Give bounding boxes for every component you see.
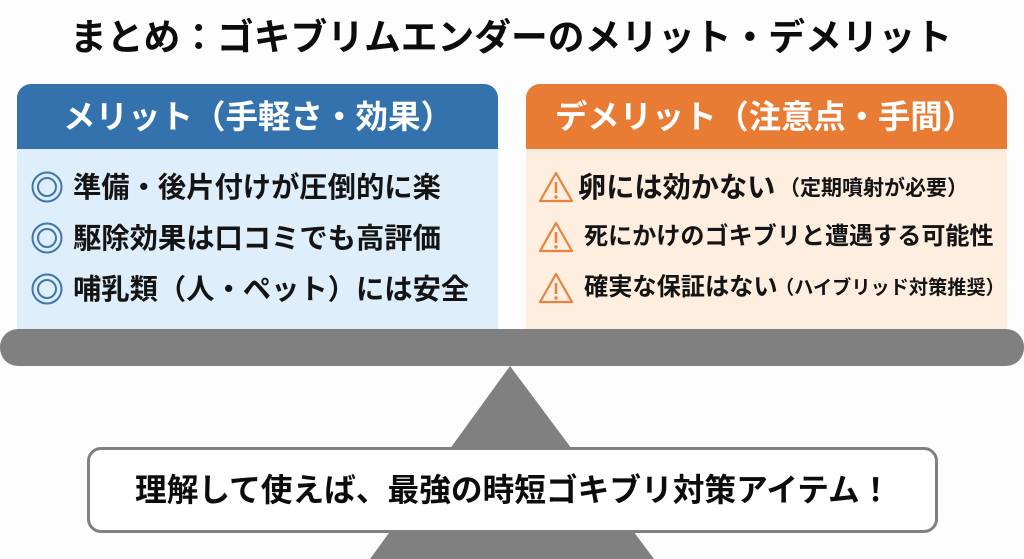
demerit text 2: 死にかけのゴキブリと遭遇する可能性	[584, 223, 994, 250]
demerit note 1: （定期噴射が必要）	[779, 177, 968, 200]
icon: double circle	[32, 172, 62, 202]
icon: double circle	[32, 222, 62, 254]
panel: demerits	[526, 84, 1007, 329]
merit text 1: 準備・後片付けが圧倒的に楽	[73, 171, 441, 203]
merits heading: メリット（手軽さ・効果）	[63, 99, 453, 135]
demerits header	[526, 84, 1007, 149]
merits header	[17, 84, 498, 149]
icon: warning triangle	[538, 172, 574, 202]
title: まとめ：ゴキブリムエンダーのメリット・デメリット	[70, 17, 952, 58]
icon: scale fulcrum	[370, 366, 654, 559]
scale beam	[0, 329, 1024, 366]
merit item 1	[32, 171, 441, 203]
demerit text 1: 卵には効かない	[578, 171, 775, 203]
demerit text 3: 確実な保証はない	[584, 274, 778, 301]
demerit item 3	[538, 272, 1005, 304]
merit text 3: 哺乳類（人・ペット）には安全	[73, 273, 469, 305]
merit item 3	[32, 273, 469, 305]
merit text 2: 駆除効果は口コミでも高評価	[73, 222, 441, 254]
merit item 2	[32, 222, 441, 254]
icon: warning triangle	[538, 272, 574, 304]
callout text: 理解して使えば、最強の時短ゴキブリ対策アイテム！	[135, 472, 891, 508]
panel: merits	[17, 84, 498, 329]
demerits heading: デメリット（注意点・手間）	[555, 99, 975, 135]
icon: warning triangle	[538, 222, 574, 252]
demerit note 3: （ハイブリッド対策推奨）	[775, 278, 1005, 299]
demerit item 2	[538, 222, 994, 252]
icon: double circle	[32, 274, 62, 304]
callout	[87, 447, 938, 533]
demerit item 1	[538, 171, 968, 203]
